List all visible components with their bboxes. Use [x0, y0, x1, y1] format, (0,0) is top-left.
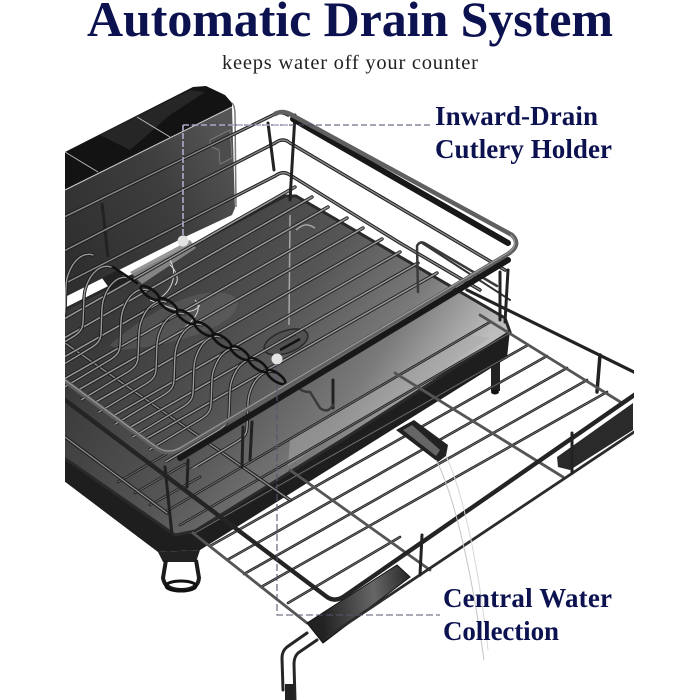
- rack rim: [65, 112, 516, 452]
- subtitle: keeps water off your counter: [222, 52, 478, 74]
- label: inward-drain cutlery holder: Inward-Drain: [435, 101, 598, 131]
- callout leader: inward-drain cutlery holder: [178, 125, 430, 246]
- left tray foot: [158, 550, 200, 591]
- lower extending rack: [65, 315, 640, 643]
- rim highlight: [65, 235, 515, 451]
- tray surface: [60, 196, 510, 535]
- cutlery holder caddy: [65, 86, 236, 297]
- thick side rail: [65, 391, 640, 600]
- rack side rails: [60, 113, 505, 513]
- rack rim shadow band: [180, 119, 508, 458]
- lower front rail: [327, 428, 640, 637]
- upper dish rack: [65, 110, 518, 536]
- bracket below spout: [102, 271, 128, 290]
- water pool: [110, 292, 238, 350]
- label: central water collection: Collection: [443, 616, 559, 646]
- tray side bands: [60, 330, 510, 552]
- label: inward-drain cutlery holder: Cutlery Holder: [435, 134, 612, 164]
- drip tray: [60, 196, 510, 552]
- light slab near front: [288, 335, 490, 466]
- label: inward-drain cutlery holder: [435, 101, 612, 164]
- label: central water collection: [443, 583, 612, 646]
- falling water stream: [436, 456, 488, 660]
- callout leader: central water collection: [272, 354, 440, 615]
- label: central water collection: Central Water: [443, 583, 612, 613]
- lower rack cross bars: [193, 315, 622, 623]
- lower rack back bar: [422, 243, 640, 392]
- small hook wires: [297, 242, 497, 410]
- front black panel: [307, 565, 410, 643]
- spout splash: [150, 260, 200, 335]
- water trail: [289, 215, 315, 325]
- rack posts: [165, 115, 508, 535]
- central drain: [263, 328, 309, 356]
- drain channel: [396, 420, 448, 462]
- twisted spine: [113, 267, 287, 387]
- right black panel: [557, 403, 633, 470]
- water spout: [130, 240, 196, 284]
- lower rack wires: [118, 322, 607, 603]
- lower rack posts: [420, 433, 572, 575]
- rack long wires: [65, 185, 439, 440]
- folding legs: [282, 633, 317, 700]
- plate holder waves: [65, 252, 276, 470]
- right tray foot: [491, 345, 500, 394]
